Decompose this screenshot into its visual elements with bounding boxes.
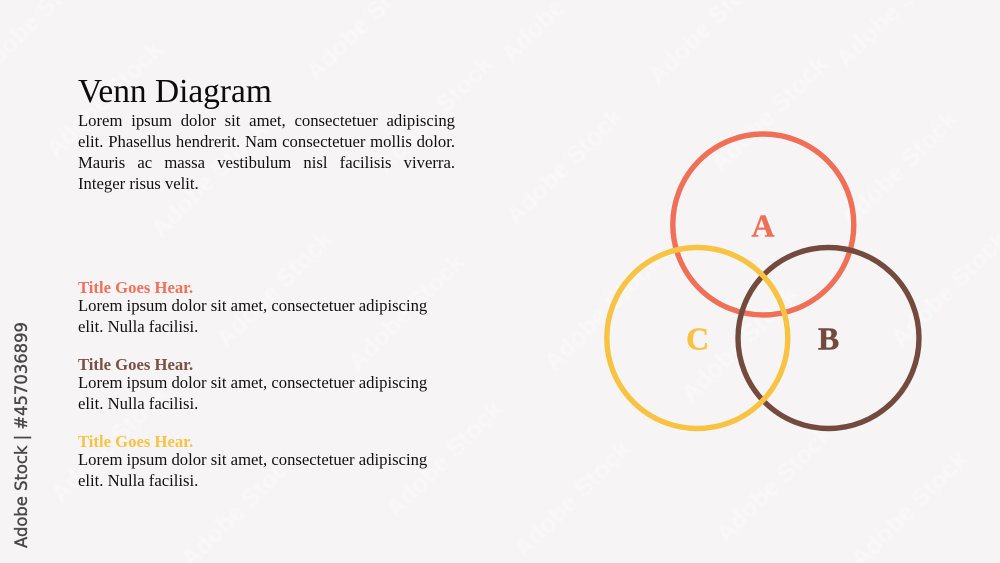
text: Adobe Stock bbox=[508, 435, 636, 563]
text: Adobe Stock bbox=[710, 420, 838, 548]
text block: item C bbox=[78, 432, 427, 490]
text block: item C: Title Goes Hear. bbox=[78, 432, 193, 451]
text block: item C: elit. Nulla facilisi. bbox=[78, 471, 198, 490]
text: Adobe Stock bbox=[145, 115, 273, 243]
text: Adobe Stock bbox=[342, 248, 470, 376]
text: Adobe Stock bbox=[370, 50, 498, 178]
text: Adobe Stock bbox=[500, 102, 628, 230]
label B: B bbox=[818, 320, 839, 356]
text block: item B bbox=[78, 355, 427, 413]
text block: item C: Lorem ipsum dolor sit amet, consectetuer adipiscing bbox=[78, 450, 427, 469]
circle C bbox=[607, 248, 788, 428]
text block: item A: Title Goes Hear. bbox=[78, 278, 193, 297]
text: Adobe Stock bbox=[705, 50, 833, 178]
stock id vertical text: Adobe Stock | #457036899 bbox=[12, 322, 31, 548]
text: Adobe Stock bbox=[45, 380, 173, 508]
circle B bbox=[738, 248, 919, 428]
text: Adobe Stock bbox=[210, 225, 338, 353]
text block: item B: elit. Nulla facilisi. bbox=[78, 394, 198, 413]
text: Adobe Stock bbox=[380, 395, 508, 523]
label A: A bbox=[751, 208, 775, 244]
circle A bbox=[673, 134, 854, 315]
text block: item A bbox=[78, 278, 427, 336]
text block: item A: elit. Nulla facilisi. bbox=[78, 317, 198, 336]
label C: C bbox=[686, 320, 709, 356]
text block: item A: Lorem ipsum dolor sit amet, consectetuer adipiscing bbox=[78, 296, 427, 315]
text: Adobe Stock bbox=[675, 280, 803, 408]
intro paragraph: Lorem ipsum dolor sit amet, consectetuer adipiscing elit. Phasellus hendrerit. Nam consectetuer mollis dolor. Mauris ac massa vestibulum nisl facilisis viverra. Integer risus velit. bbox=[78, 110, 455, 192]
text: Adobe Stock bbox=[835, 105, 963, 233]
text: Adobe Stock bbox=[40, 35, 168, 163]
text: Adobe Stock bbox=[538, 248, 666, 376]
text block: item B: Lorem ipsum dolor sit amet, consectetuer adipiscing bbox=[78, 373, 427, 392]
text block: item B: Title Goes Hear. bbox=[78, 355, 193, 374]
title: Venn Diagram bbox=[78, 73, 272, 110]
